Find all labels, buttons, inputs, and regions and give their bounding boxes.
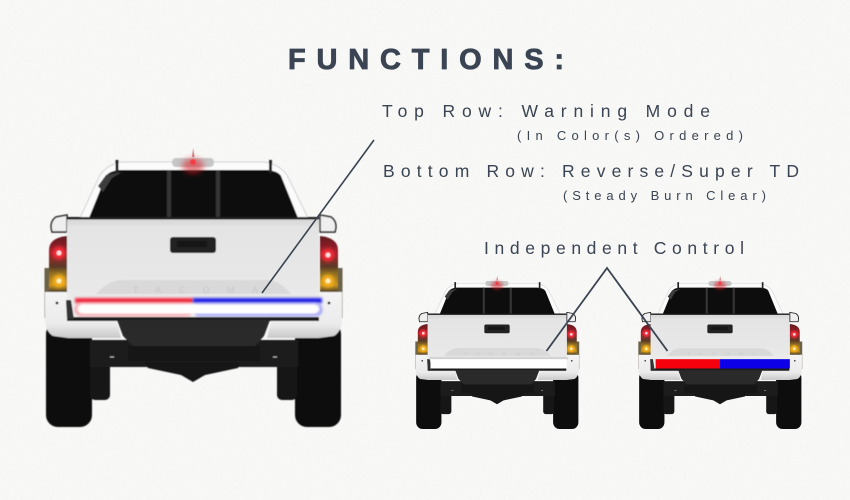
label: independent control: Independent Control — [484, 238, 744, 258]
light bar: red, blue and white rows — [75, 298, 322, 316]
text block: top row: Top Row: Warning Mode — [382, 101, 710, 121]
text block: top row — [382, 101, 743, 143]
text block: top row: (In Color(s) Ordered) — [517, 128, 743, 143]
callout lines: independent control — [546, 268, 668, 351]
truck: warning only — [638, 276, 802, 429]
text block: bottom row: (Steady Burn Clear) — [563, 188, 766, 203]
callout line: main truck — [262, 140, 374, 293]
truck: warning mode and reverse — [44, 148, 342, 427]
light bar: white — [429, 357, 568, 368]
text block: bottom row — [383, 161, 799, 203]
truck: reverse only — [415, 276, 579, 429]
text block: bottom row: Bottom Row: Reverse/Super TD — [383, 161, 799, 181]
emblem: TACOMA — [133, 285, 258, 295]
title: FUNCTIONS: — [288, 44, 564, 76]
emblem: TACOMA — [464, 351, 533, 357]
emblem: TACOMA — [687, 351, 756, 357]
light bar: red and blue — [656, 359, 790, 368]
